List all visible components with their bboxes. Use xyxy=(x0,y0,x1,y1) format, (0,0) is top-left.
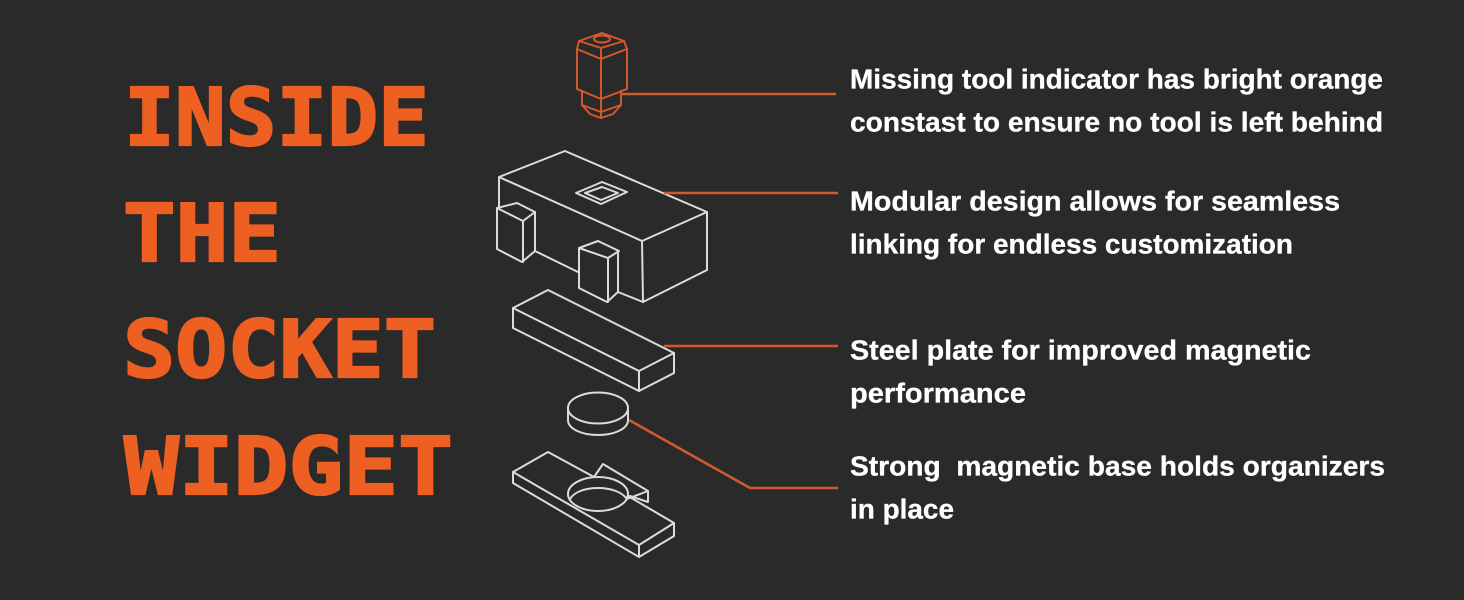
centre connector tab xyxy=(579,241,619,302)
text block: steel plate: Steel plate for improved magnetic xyxy=(850,334,1311,366)
square socket opening xyxy=(576,182,627,204)
icon: magnetic disc xyxy=(568,392,628,435)
title line: THE: THE xyxy=(123,188,281,280)
text block: magnetic base xyxy=(850,450,1385,524)
title line: INSIDE: INSIDE xyxy=(124,72,429,164)
text block: steel plate xyxy=(850,334,1311,408)
text block: magnetic base: Strong magnetic base holds organizers xyxy=(850,450,1385,482)
icon: steel plate xyxy=(513,290,674,391)
leader line: plate xyxy=(664,345,838,347)
text block: missing tool indicator xyxy=(850,64,1383,138)
text block: steel plate: performance xyxy=(850,378,1026,408)
leader line: disc xyxy=(629,420,838,488)
icon: orange socket part xyxy=(577,33,627,118)
icon: magnetic base xyxy=(513,452,674,557)
title xyxy=(123,72,453,513)
text block: modular design: Modular design allows for seamless xyxy=(850,186,1340,216)
title line: WIDGET: WIDGET xyxy=(124,421,453,513)
text block: missing tool indicator: constast to ensure no tool is left behind xyxy=(850,106,1383,138)
leader line: block xyxy=(664,192,838,194)
text block: modular design: linking for endless customization xyxy=(850,228,1293,260)
leader line: socket xyxy=(621,93,836,95)
title line: SOCKET: SOCKET xyxy=(123,304,436,396)
text block: magnetic base: in place xyxy=(850,494,954,524)
left connector tab xyxy=(497,203,535,262)
text block: missing tool indicator: Missing tool indicator has bright orange xyxy=(850,64,1383,94)
icon: modular block housing xyxy=(497,151,707,302)
text block: modular design xyxy=(850,186,1340,260)
